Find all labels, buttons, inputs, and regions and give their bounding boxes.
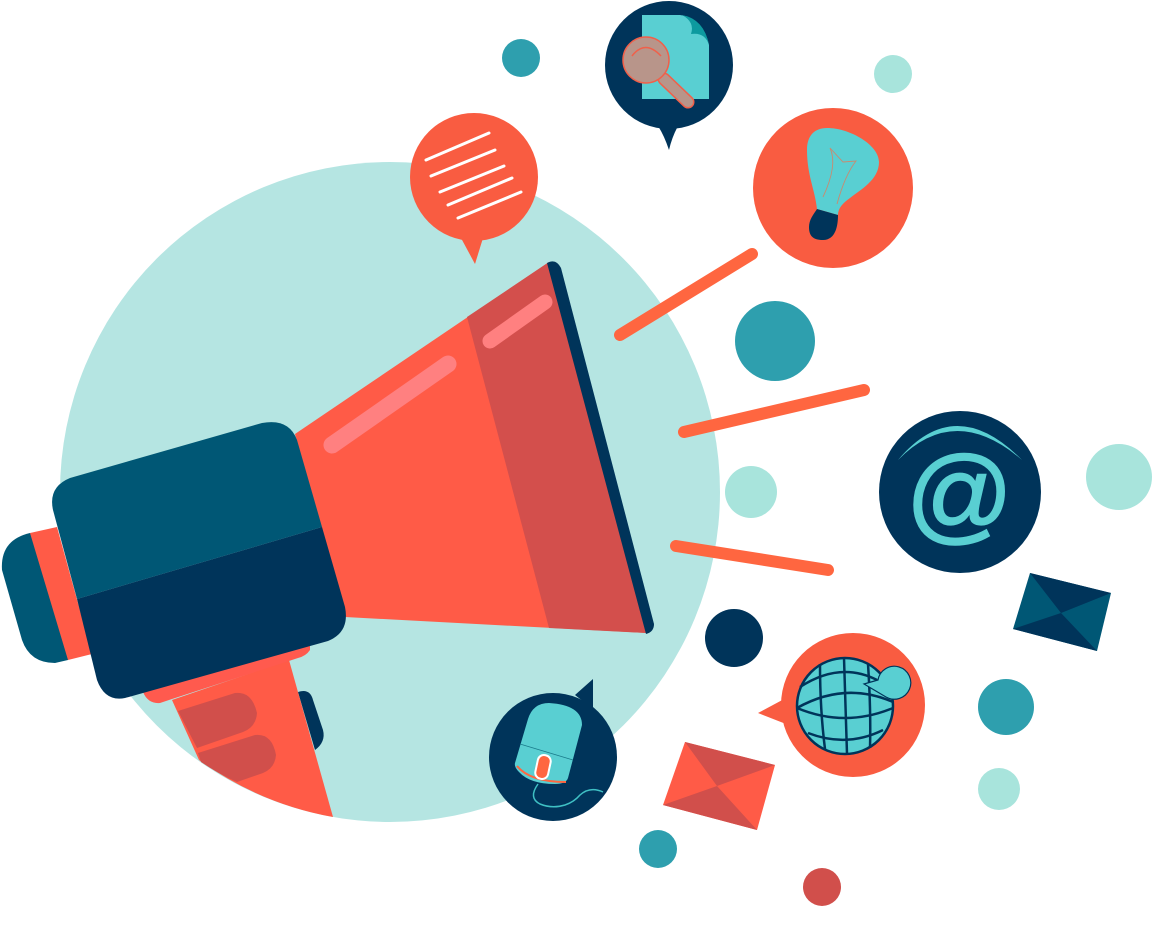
speech bubble: globe (758, 633, 925, 777)
megaphone (2, 261, 654, 817)
sound lines (620, 254, 864, 570)
speech bubble: mouse (489, 679, 617, 821)
icon: at sign: @ (906, 435, 1013, 553)
icon: at sign (879, 411, 1041, 573)
megaphone cone (295, 261, 654, 634)
speech bubble: text lines (410, 113, 538, 264)
cone highlight front (490, 302, 545, 341)
bubble: light bulb (753, 108, 913, 268)
megaphone rear cap (2, 527, 92, 663)
megaphone body (52, 422, 346, 699)
background circle (60, 162, 720, 822)
megaphone handle (143, 645, 333, 817)
cone highlight rear (332, 364, 448, 445)
speech bubble: document search (605, 1, 733, 150)
icon: red envelope (663, 742, 775, 830)
dots (502, 39, 1152, 906)
icon: dark envelope (1013, 573, 1111, 651)
